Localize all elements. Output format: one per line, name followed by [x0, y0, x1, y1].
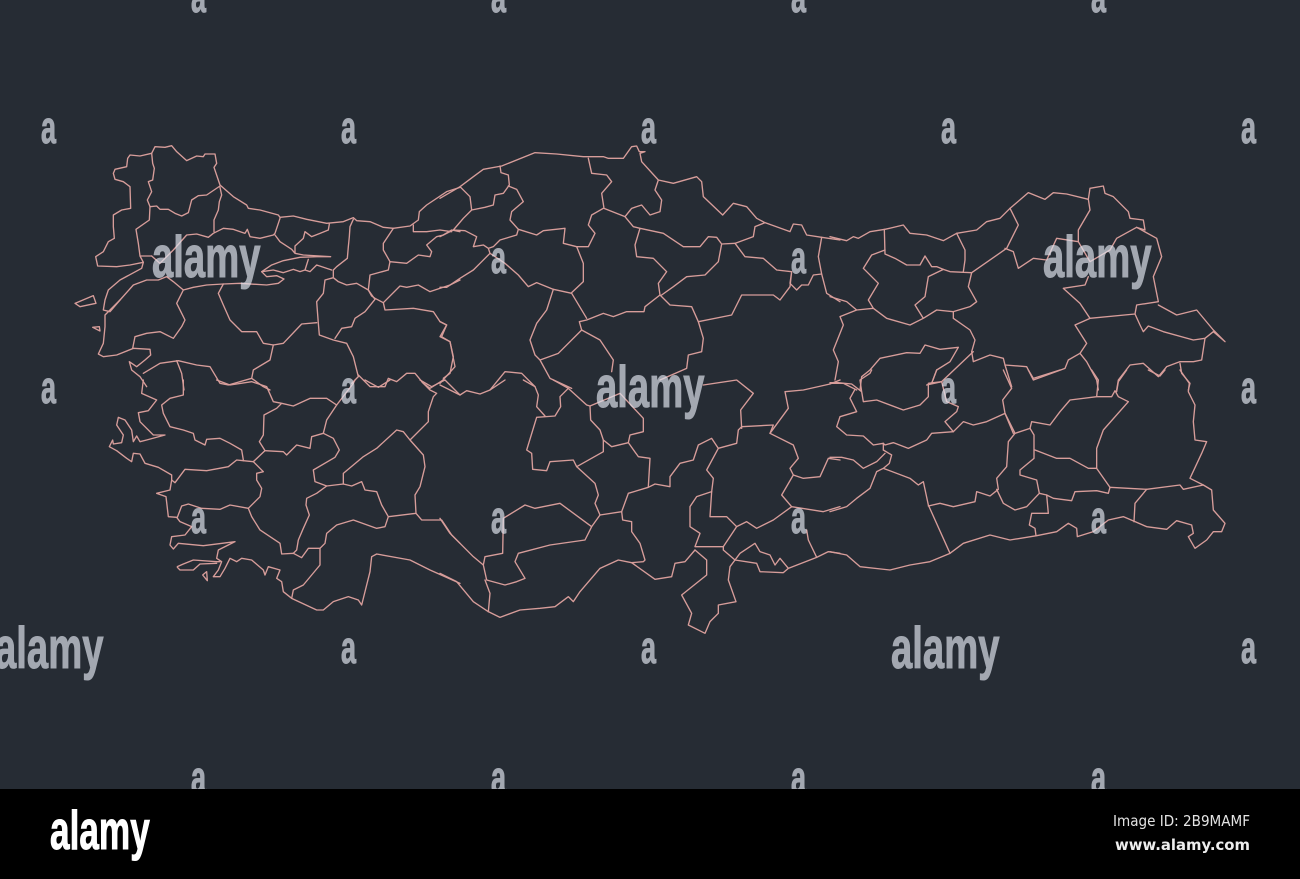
- watermark: small letters: a: [641, 622, 656, 673]
- map: Turkey provinces outline: [75, 146, 1225, 633]
- watermark: small letters: a: [1241, 102, 1256, 153]
- watermark: large logos: alamy: [596, 356, 705, 420]
- map region: north-west, Thrace and Marmara: [75, 146, 460, 390]
- map region: central north, Black Sea provinces: [440, 146, 840, 390]
- watermark: small letters: a: [41, 362, 56, 413]
- watermark: small letters: a: [1241, 362, 1256, 413]
- map region: south-east provinces: [830, 370, 1225, 570]
- watermark: small letters: a: [641, 102, 656, 153]
- watermark: small letters: a: [491, 232, 506, 283]
- watermark: small letters: a: [341, 362, 356, 413]
- footer bar: [0, 789, 1300, 879]
- map region: central south, Mediterranean provinces and Hatay: [440, 380, 840, 633]
- map region: south-west, Aegean and Mediterranean: [109, 380, 460, 610]
- watermark: small letters: a: [41, 102, 56, 153]
- watermark: small letters: a: [191, 492, 206, 543]
- watermark: small letters: a: [491, 492, 506, 543]
- watermark: small letters: a: [1241, 622, 1256, 673]
- footer logo: alamy: [50, 799, 150, 861]
- watermark: small letters: a: [1091, 752, 1106, 803]
- watermark: large logos: [0, 226, 1152, 681]
- watermark: large logos: alamy: [1043, 226, 1152, 290]
- watermark: small letters: a: [191, 752, 206, 803]
- watermark: small letters: a: [791, 232, 806, 283]
- map region: north-east provinces: [830, 186, 1225, 390]
- watermark: large logos: alamy: [152, 226, 261, 290]
- watermark: large logos: alamy: [891, 617, 1000, 681]
- image id: Image ID: 2B9MAMF: [1113, 812, 1250, 830]
- watermark: small letters: a: [791, 752, 806, 803]
- watermark: small letters: a: [941, 102, 956, 153]
- watermark: small letters: a: [791, 492, 806, 543]
- watermark: small letters: a: [491, 752, 506, 803]
- watermark: small letters: a: [1091, 492, 1106, 543]
- watermark: small letters: a: [341, 102, 356, 153]
- watermark: small letters: a: [341, 622, 356, 673]
- website: www.alamy.com: [1115, 836, 1250, 854]
- watermark: small letters: a: [941, 362, 956, 413]
